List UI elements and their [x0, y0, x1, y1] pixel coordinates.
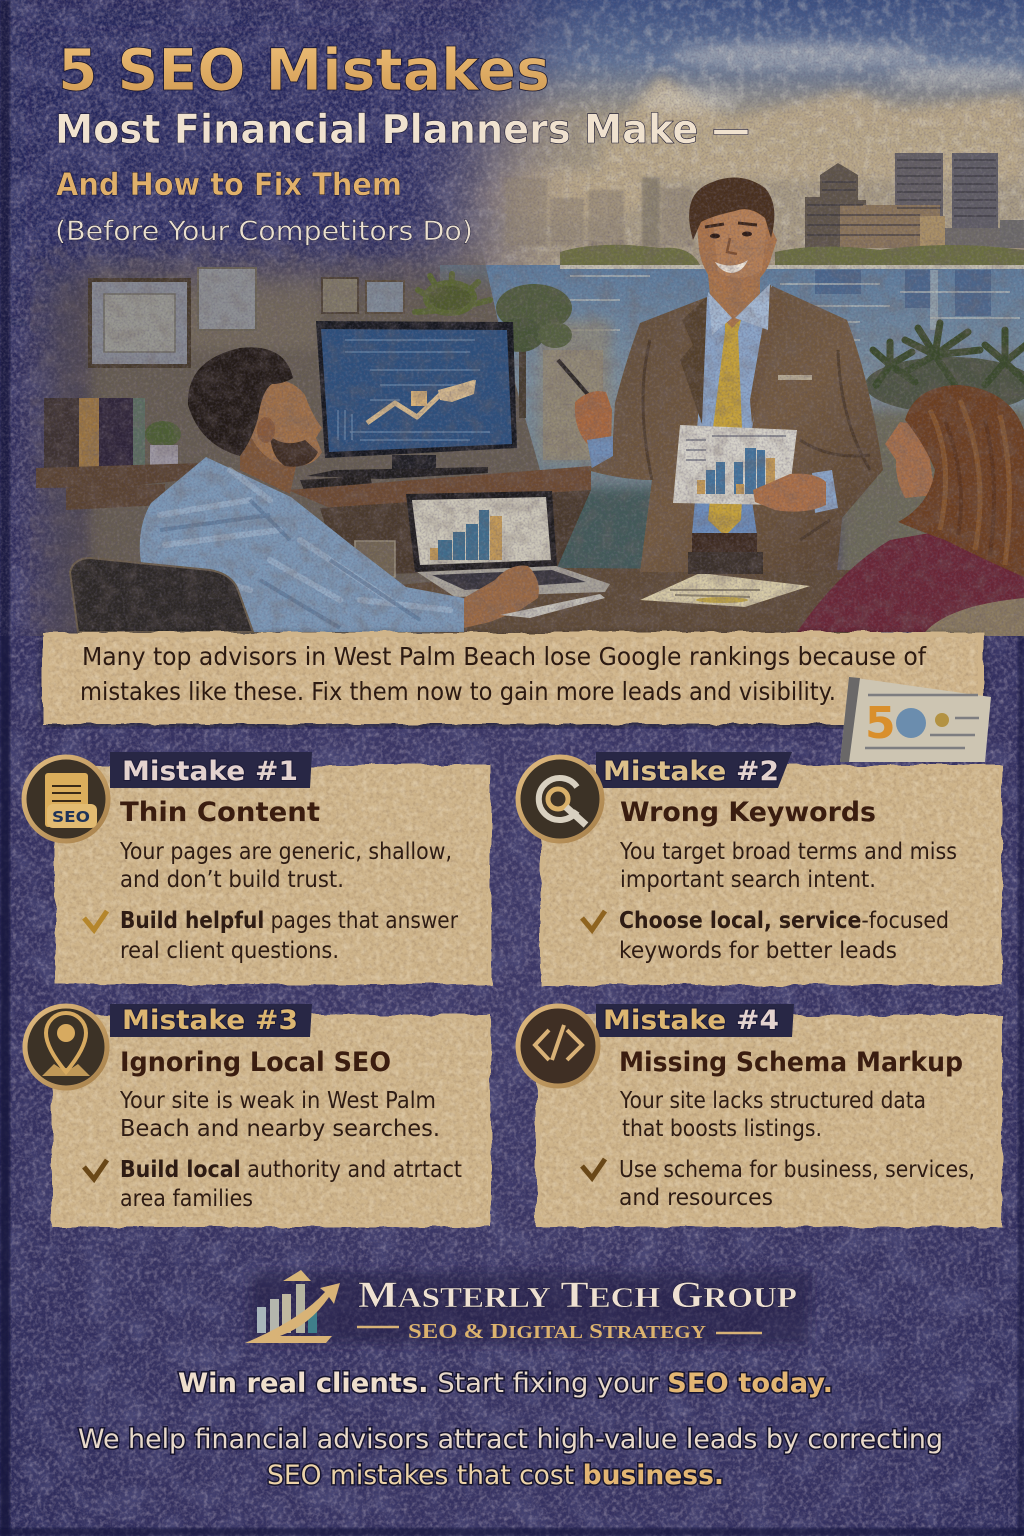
body: You target broad terms and miss	[619, 839, 957, 865]
icon: check	[84, 1160, 107, 1179]
card: mistake 3	[25, 1004, 491, 1227]
palm plant behind monitor	[415, 274, 490, 313]
card: mistake 3: Beach and nearby searches.	[120, 1116, 440, 1142]
icon: check	[582, 1159, 605, 1178]
papers on desk	[640, 573, 810, 607]
card: mistake 4: that boosts listings.	[622, 1116, 822, 1142]
card: mistake 4: and resources	[619, 1185, 773, 1211]
jacket	[587, 285, 883, 572]
intro text: Many top advisors in West Palm Beach lose Google rankings because of	[82, 642, 927, 671]
card: mistake 2: important search intent.	[620, 867, 876, 893]
small report graphic	[840, 677, 991, 762]
bookshelf with books	[36, 398, 205, 510]
hair	[898, 385, 1024, 577]
lapels	[680, 297, 707, 424]
face	[885, 422, 935, 498]
illustration: office scene with waterfront skyline	[20, 0, 1024, 640]
card: mistake 4	[518, 1004, 1002, 1227]
potted tree	[496, 284, 572, 418]
card: mistake 1	[24, 752, 491, 984]
collar	[708, 284, 770, 335]
pen	[558, 360, 590, 397]
closing statement: SEO mistakes that cost business.	[267, 1460, 724, 1491]
glass on desk	[355, 541, 395, 577]
shirt	[140, 457, 464, 632]
computer monitor with chart	[306, 321, 517, 479]
heading: Ignoring Local SEO	[120, 1047, 391, 1078]
card: mistake 3: Mistake #3	[122, 1005, 298, 1036]
heading: Thin Content	[120, 797, 320, 828]
face	[697, 193, 777, 293]
body: Your site is weak in West Palm	[119, 1088, 436, 1114]
fix text: Build local authority and atrtact	[120, 1157, 462, 1183]
intro banner	[42, 632, 984, 724]
gold tagline: And How to Fix Them	[56, 167, 402, 203]
rule lines	[357, 1327, 762, 1333]
card: mistake 2	[518, 752, 1002, 985]
closing statement	[78, 1424, 943, 1491]
hand on laptop	[464, 566, 539, 628]
hair	[188, 347, 293, 456]
left hand	[575, 391, 612, 447]
fix text: Choose local, service-focused	[619, 908, 949, 934]
presenter hand	[753, 474, 826, 512]
call to action: Win real clients. Start fixing your SEO today.	[178, 1368, 833, 1399]
distant skyline	[505, 177, 692, 247]
texture overlay on scene	[0, 0, 1024, 640]
card: mistake 2: keywords for better leads	[619, 938, 897, 964]
fix text: Build helpful pages that answer	[120, 908, 458, 934]
office wall	[20, 240, 550, 640]
area behind presenter	[540, 320, 1024, 580]
left shirt cuff	[587, 436, 613, 468]
card: mistake 1: real client questions.	[120, 938, 339, 964]
water	[440, 265, 1024, 505]
tag	[110, 752, 312, 788]
subtitle: Most Financial Planners Make —	[55, 107, 750, 153]
strapline: SEO & D IGITAL STRATEGY	[408, 1319, 706, 1343]
company name: MASTERLY TECH GROUP	[358, 1275, 797, 1316]
beard	[270, 436, 318, 467]
closing statement: We help financial advisors attract high-value leads by correcting	[78, 1424, 943, 1455]
office chair	[70, 558, 253, 632]
standing man	[558, 178, 883, 574]
body: Your site lacks structured data	[619, 1088, 926, 1114]
palm trees right	[865, 323, 1024, 413]
card: mistake 3: area families	[120, 1186, 253, 1212]
maroon top	[797, 533, 1024, 632]
paper under hand	[500, 594, 605, 618]
icon: map pin	[25, 1006, 107, 1088]
card: mistake 1: Mistake #1	[122, 756, 298, 787]
card: mistake 1: and don’t build trust.	[120, 867, 344, 893]
neck and face	[240, 430, 300, 494]
pocket square	[778, 375, 812, 380]
icon: check	[582, 911, 605, 930]
back credenza	[288, 466, 591, 575]
title: 5 SEO Mistakes	[58, 36, 550, 104]
laptop with chart	[406, 491, 610, 597]
belt	[692, 533, 757, 552]
title block	[55, 36, 750, 247]
heading: Missing Schema Markup	[619, 1047, 963, 1078]
report held by presenter	[673, 425, 826, 512]
logo mark	[245, 1270, 340, 1343]
right shirt cuff	[812, 470, 838, 513]
parenthetical line: (Before Your Competitors Do)	[55, 216, 473, 247]
icon: code brackets	[518, 1006, 598, 1086]
intro banner: mistakes like these. Fix them now to gain more leads and visibility.	[80, 677, 836, 706]
small report graphic: 5	[865, 698, 896, 749]
shoreline trees	[560, 245, 1024, 265]
skyline towers	[805, 153, 1024, 248]
tie	[713, 316, 742, 428]
woman seen from behind	[797, 385, 1024, 640]
office chair back	[923, 593, 1024, 640]
fix text: Use schema for business, services,	[619, 1157, 975, 1183]
seated man	[140, 347, 539, 632]
tag	[596, 752, 792, 788]
pants and belt	[688, 550, 763, 574]
desk items on credenza	[300, 478, 372, 489]
card: mistake 2: Mistake #2	[603, 756, 779, 787]
icon: SEO document	[24, 757, 108, 841]
icon: magnifier G	[518, 757, 602, 841]
neck	[708, 275, 760, 328]
body: Your pages are generic, shallow,	[119, 839, 452, 865]
hair	[689, 178, 774, 240]
icon: SEO document: SEO	[52, 808, 90, 826]
shirt	[697, 285, 772, 430]
icon: check	[84, 911, 107, 930]
smile	[715, 260, 748, 273]
jacket folds	[643, 340, 870, 540]
tag	[110, 1004, 312, 1037]
eyes and brows	[705, 223, 757, 254]
tag	[596, 1004, 794, 1037]
logo: Masterly Tech Group	[245, 1270, 810, 1344]
sky and clouds	[408, 0, 1024, 275]
main desk	[403, 568, 850, 634]
card: mistake 4: Mistake #4	[603, 1005, 779, 1036]
wall frames	[90, 268, 603, 460]
heading: Wrong Keywords	[620, 797, 876, 828]
